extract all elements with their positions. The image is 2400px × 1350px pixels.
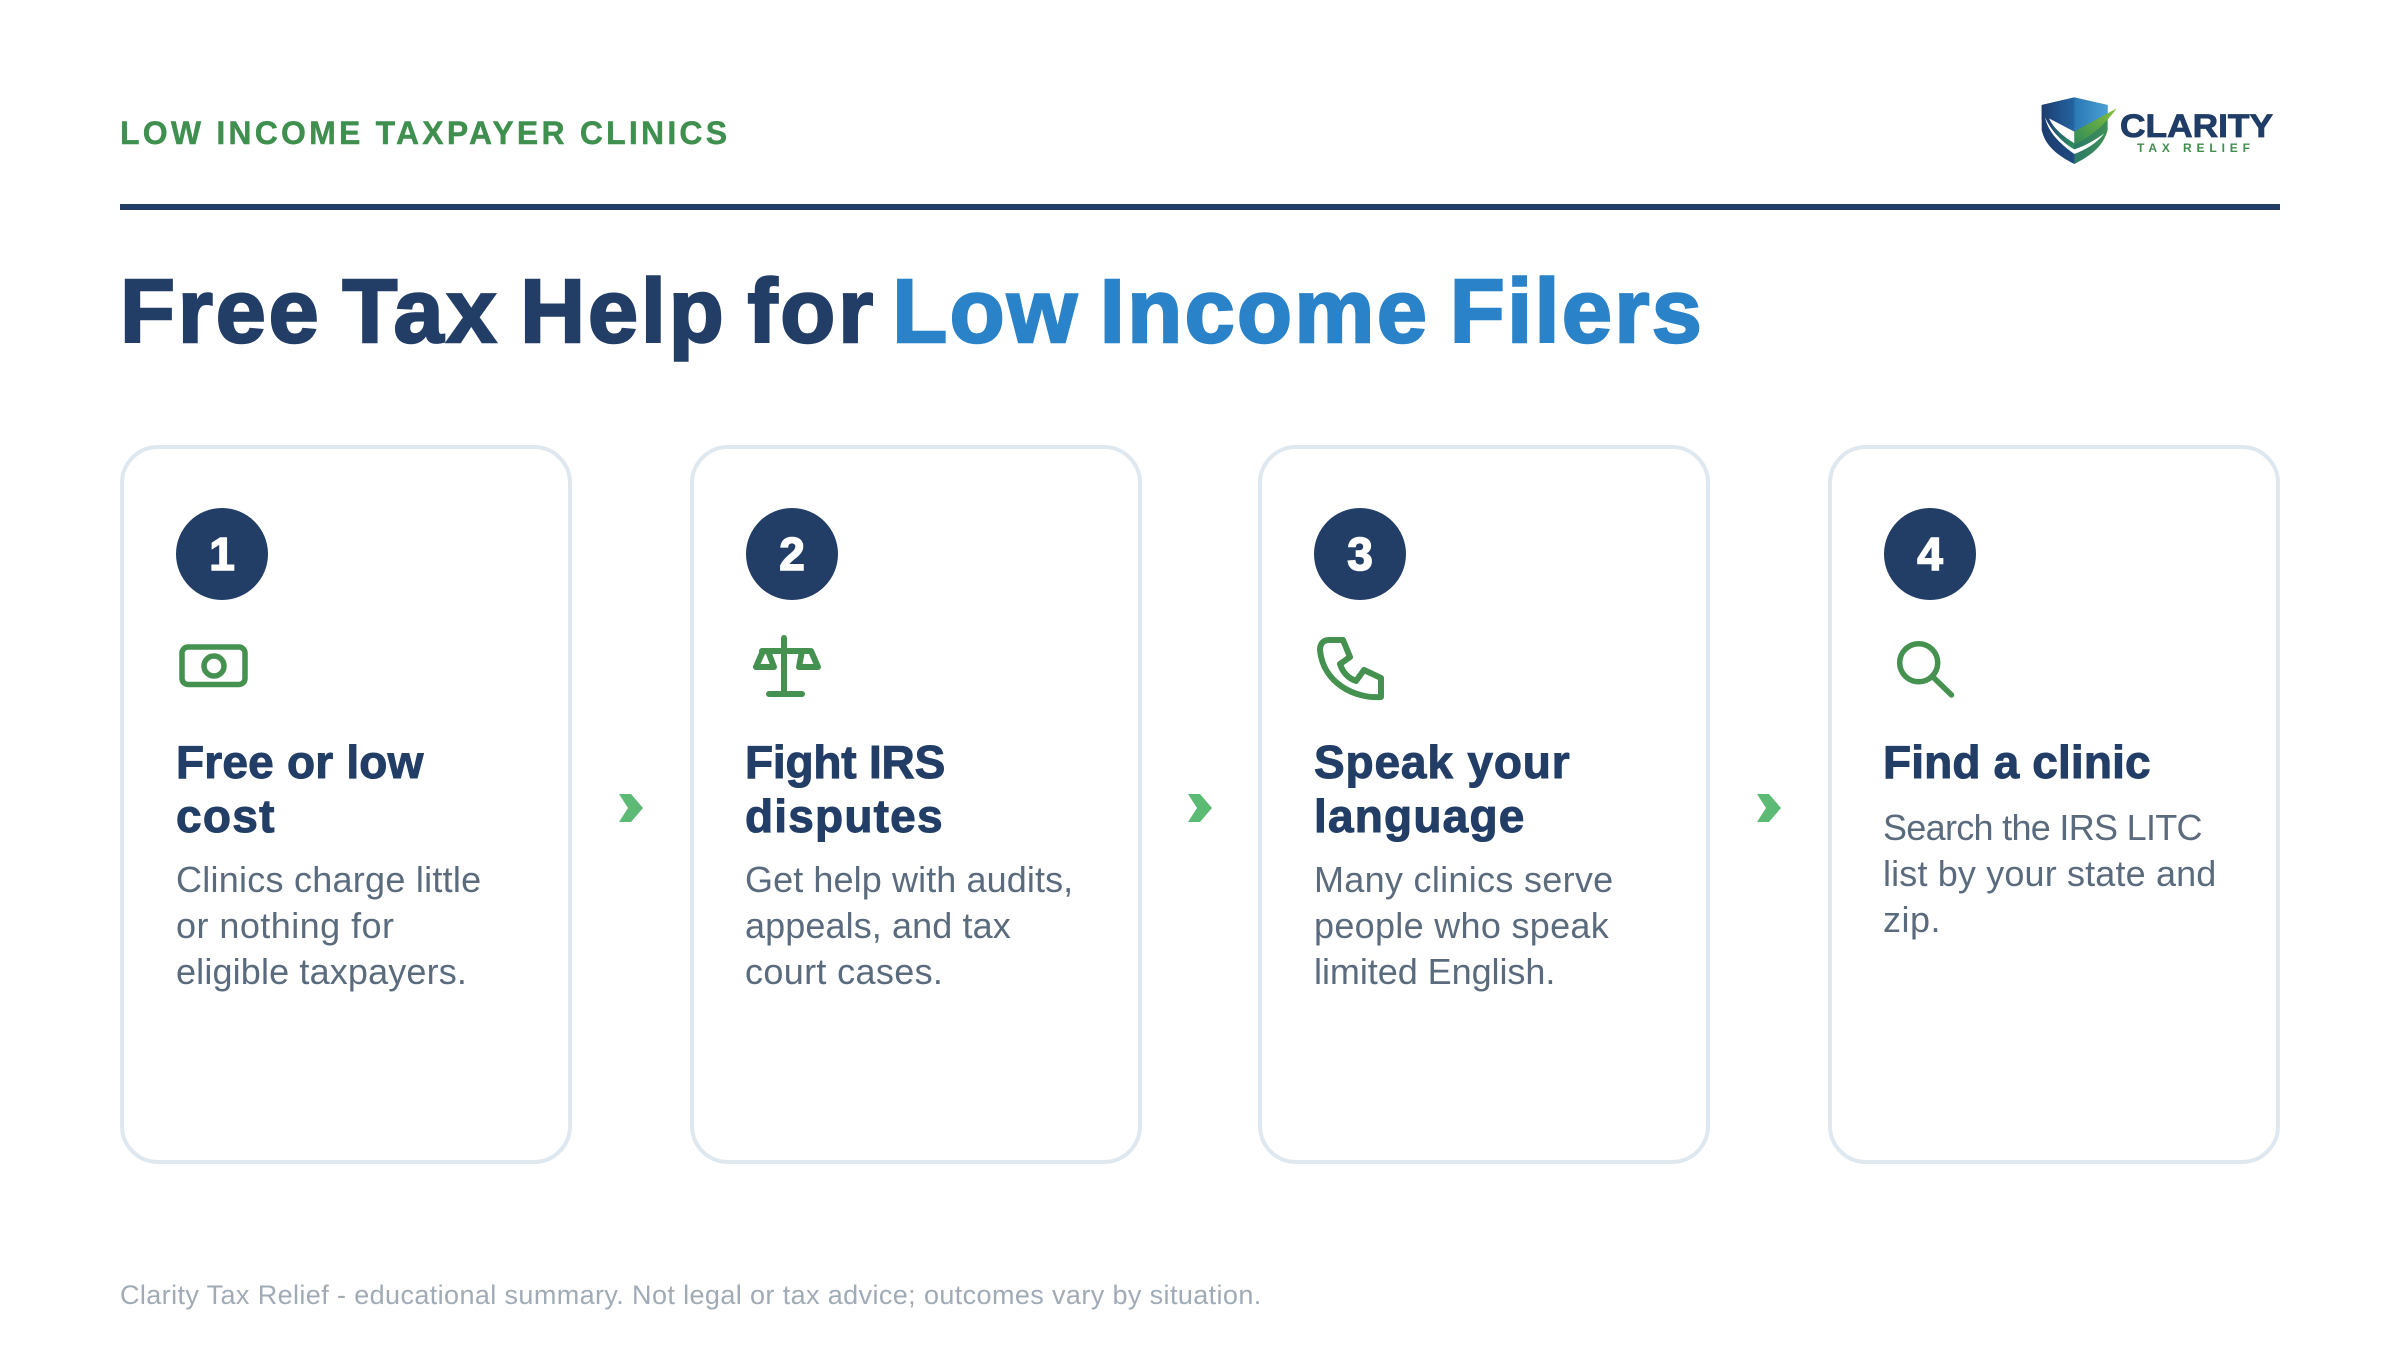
step 2 heading: disputes [745,790,944,842]
arrow 3 [1757,794,1781,822]
step 3 heading [1314,736,1570,842]
icon: phone [1317,637,1384,700]
step 4 text [1883,807,2216,940]
icon: magnifier [1896,641,1954,698]
step 4 text: zip. [1883,899,1941,940]
step 2 number [746,508,838,600]
step 2 text [745,859,1073,992]
step 2 number: 2 [779,528,805,580]
step 1 number [176,508,268,600]
step 1 text: Clinics charge little [176,859,481,900]
step 3 heading: Speak your [1314,736,1570,788]
step 2 text: court cases. [745,951,943,992]
step 4 heading: Find a clinic [1883,736,2151,788]
step 3 text: limited English. [1314,951,1555,992]
icon: banknote [179,644,248,688]
step 2 text: appeals, and tax [745,905,1011,946]
step 1 text: eligible taxpayers. [176,951,467,992]
step 2 text: Get help with audits, [745,859,1073,900]
step 2 heading [745,736,945,842]
step 3 number: 3 [1347,528,1373,580]
header rule [120,204,2280,210]
step 1 heading [176,736,424,842]
logo wordmark: CLARITY [2120,108,2273,144]
panel: step 2 card [690,445,1142,1164]
footnote: Clarity Tax Relief - educational summary. Not legal or tax advice; outcomes vary by situation. [120,1280,1262,1310]
step 4 number: 4 [1917,528,1943,580]
step 3 text: Many clinics serve [1314,859,1613,900]
step 3 text [1314,859,1613,992]
logo [2042,97,2274,164]
step 1 heading: Free or low [176,736,424,788]
step 4 text: list by your state and [1883,853,2216,894]
step 1 text: or nothing for [176,905,394,946]
step 3 number [1314,508,1406,600]
step 1 text [176,859,481,992]
step 3 text: people who speak [1314,905,1609,946]
logo shield [2042,97,2117,164]
panel: step 1 card [120,445,572,1164]
step 4 number [1884,508,1976,600]
panel: step 3 card [1258,445,1710,1164]
icon: scales [753,635,821,697]
eyebrow: LOW INCOME TAXPAYER CLINICS [120,115,730,151]
step 3 heading: language [1314,790,1526,842]
step 2 heading: Fight IRS [745,736,945,788]
step 1 heading: cost [176,790,276,842]
step 1 number: 1 [209,528,235,580]
step 4 text: Search the IRS LITC [1883,807,2202,848]
title: Free Tax Help for Low Income Filers [120,262,1704,362]
panel: step 4 card [1828,445,2280,1164]
arrow 2 [1188,794,1212,822]
logo tagline: TAX RELIEF [2137,141,2250,155]
arrow 1 [619,794,643,822]
